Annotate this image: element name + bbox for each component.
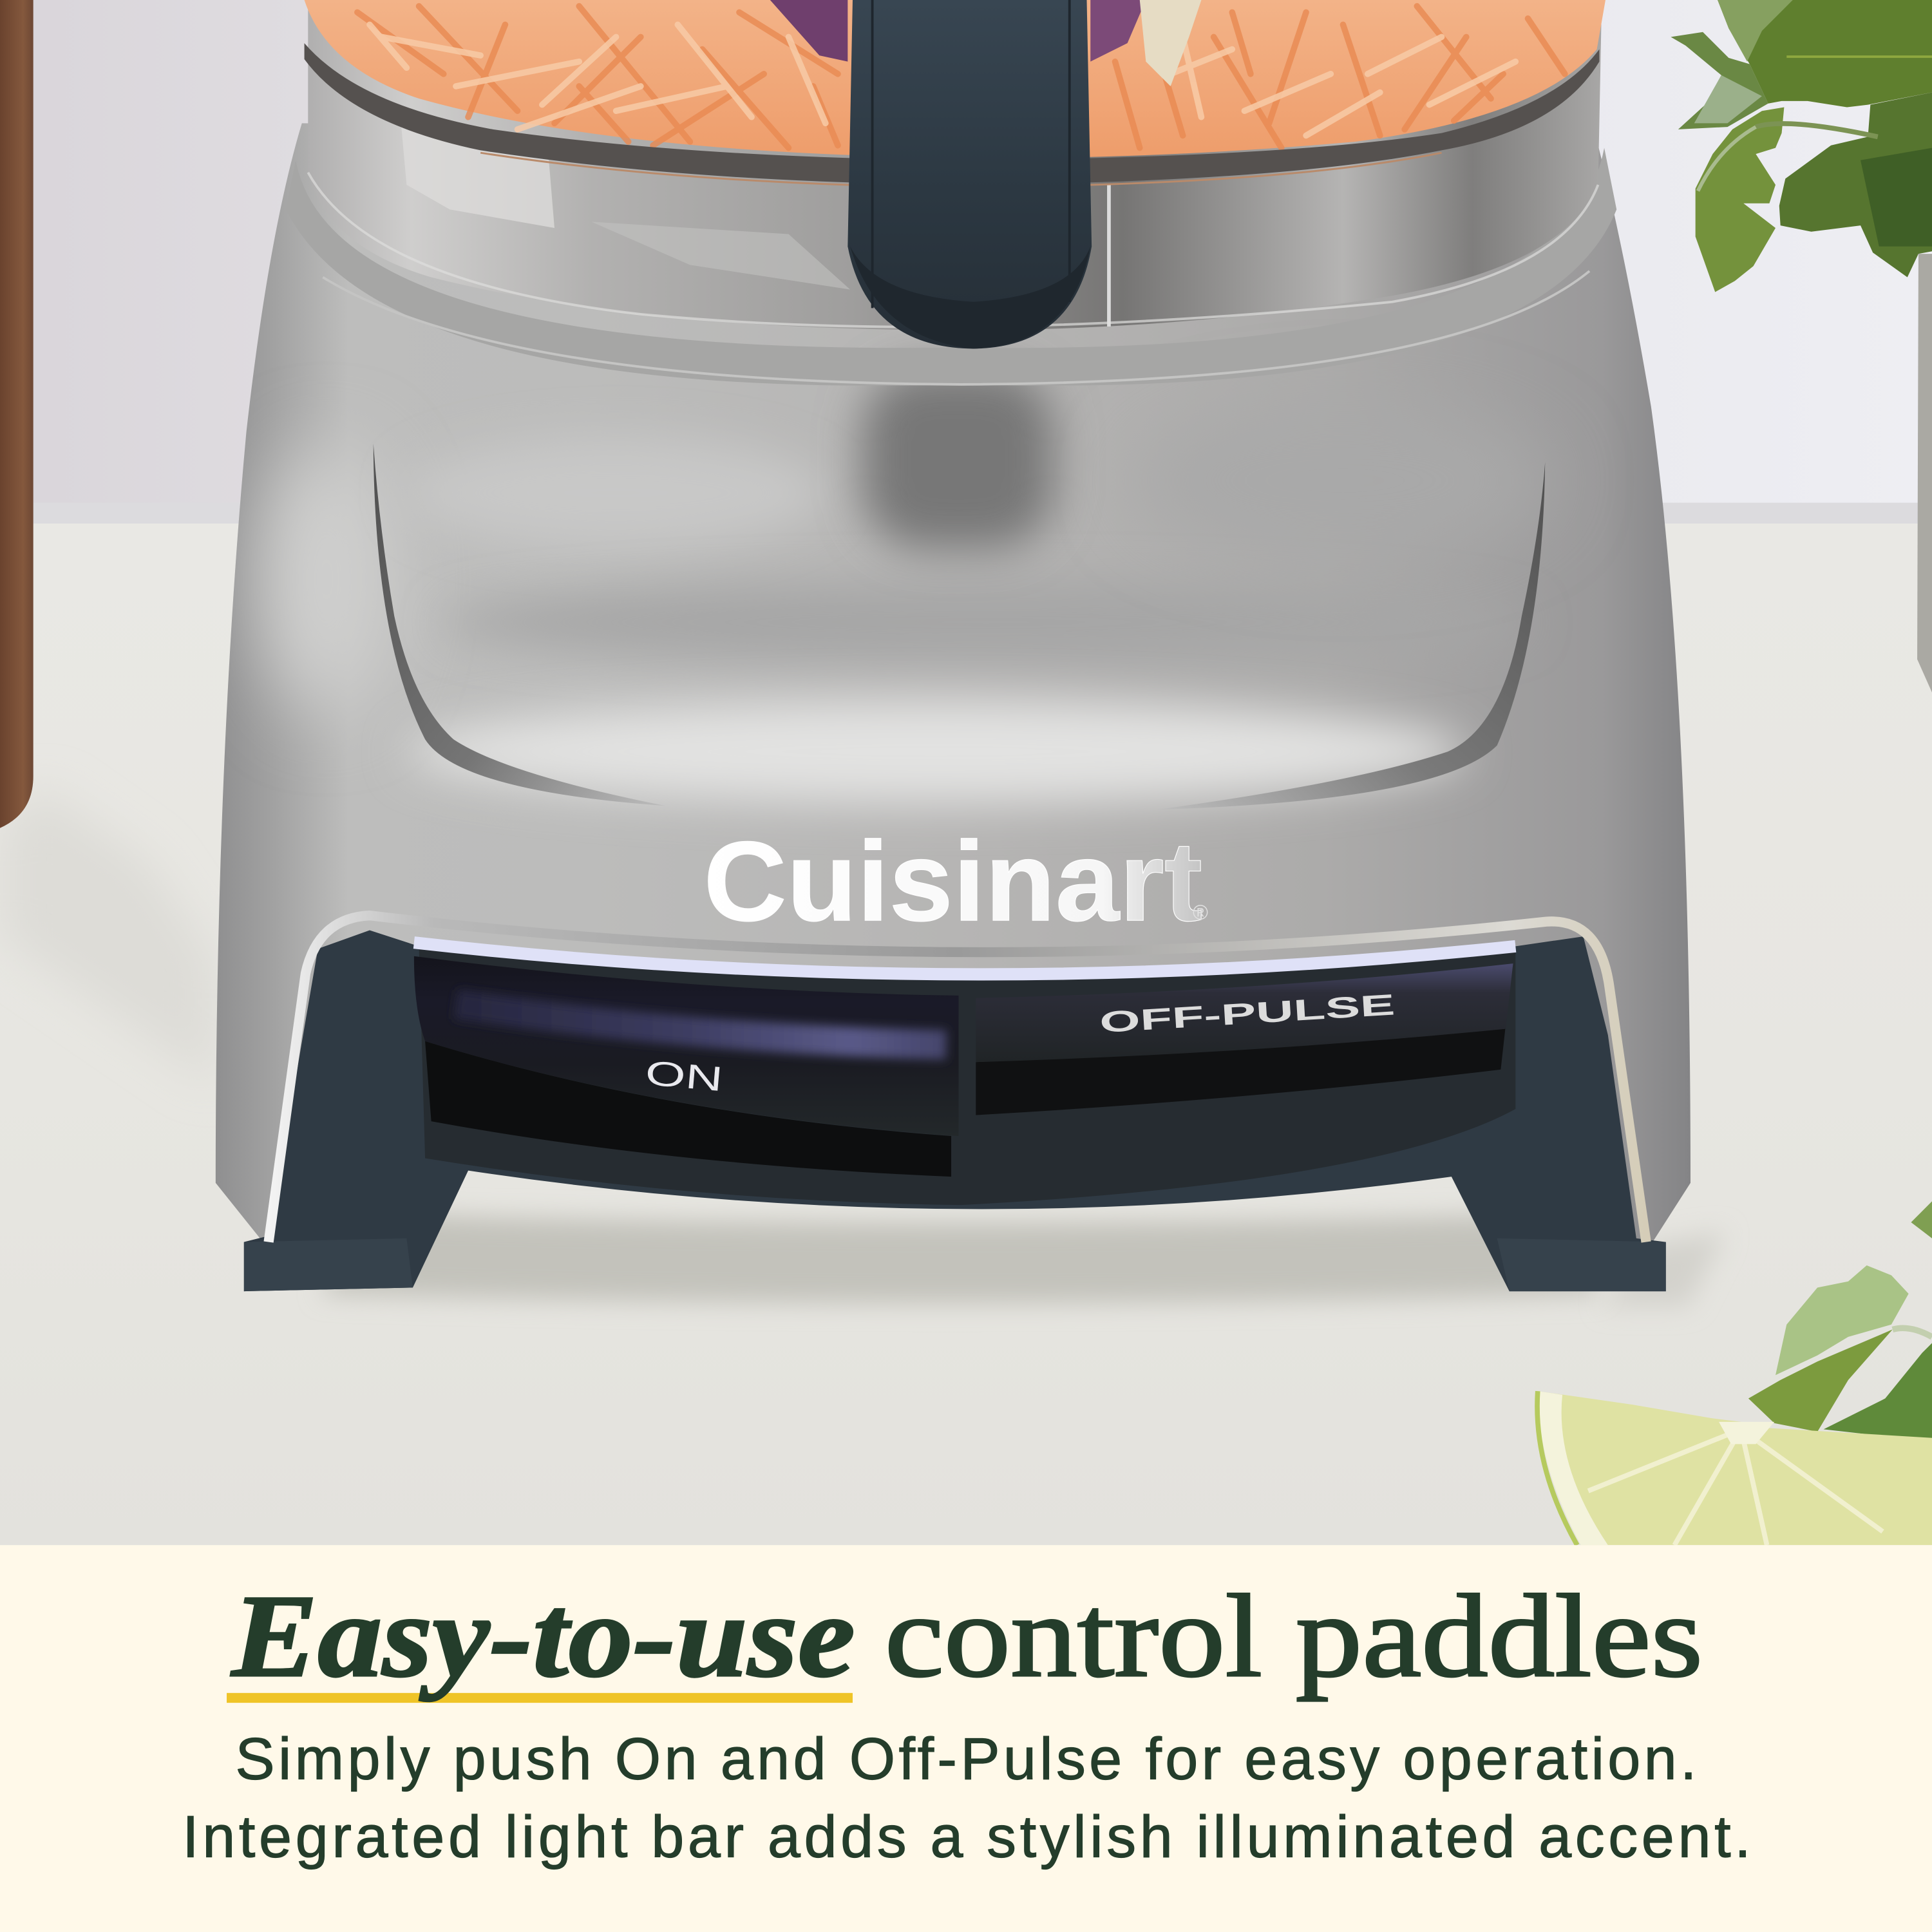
control panel <box>244 916 1666 1291</box>
wooden board at left edge <box>0 0 33 828</box>
heading remainder: control paddles <box>885 1570 1703 1701</box>
description line two: Integrated light bar adds a stylish illuminated accent. <box>182 1804 1751 1870</box>
grey object at right edge <box>1917 254 1932 692</box>
housing reflections <box>259 370 1553 803</box>
OFF-PULSE paddle <box>976 963 1513 1062</box>
handle <box>848 0 1092 348</box>
shoulder around the bowl <box>286 148 1616 386</box>
description line one: Simply push On and Off-Pulse for easy operation. <box>235 1727 1697 1792</box>
OFF-PULSE paddle front <box>976 1025 1506 1115</box>
highlight underline <box>227 1693 853 1703</box>
Cuisinart logo: ® <box>1193 900 1208 923</box>
shredded carrots <box>305 0 1605 158</box>
bowl rim ring <box>305 43 1599 187</box>
panel right crease <box>1158 462 1545 810</box>
ON paddle <box>414 956 959 1136</box>
OFF-PULSE label: OFF-PULSE <box>1099 987 1396 1039</box>
base housing <box>216 123 1690 1244</box>
food processor base <box>216 123 1690 1244</box>
Cuisinart logo: Cuisinart <box>703 819 1202 945</box>
heading <box>227 1570 1703 1703</box>
heading emphasis: Easy-to-use <box>231 1570 855 1701</box>
clear work bowl <box>305 0 1605 348</box>
cilantro bottom right <box>1748 1201 1932 1442</box>
lime wedge <box>1537 1391 1932 1545</box>
dark frame and feet <box>244 931 1666 1291</box>
light bar <box>414 943 1515 974</box>
chrome trim <box>269 916 1646 1242</box>
cilantro top right <box>1671 0 1932 292</box>
panel left crease <box>374 444 665 806</box>
ON label: ON <box>644 1054 724 1099</box>
ON paddle front <box>425 1041 951 1177</box>
foot caps <box>244 1238 1666 1291</box>
caption panel <box>0 1545 1932 1932</box>
